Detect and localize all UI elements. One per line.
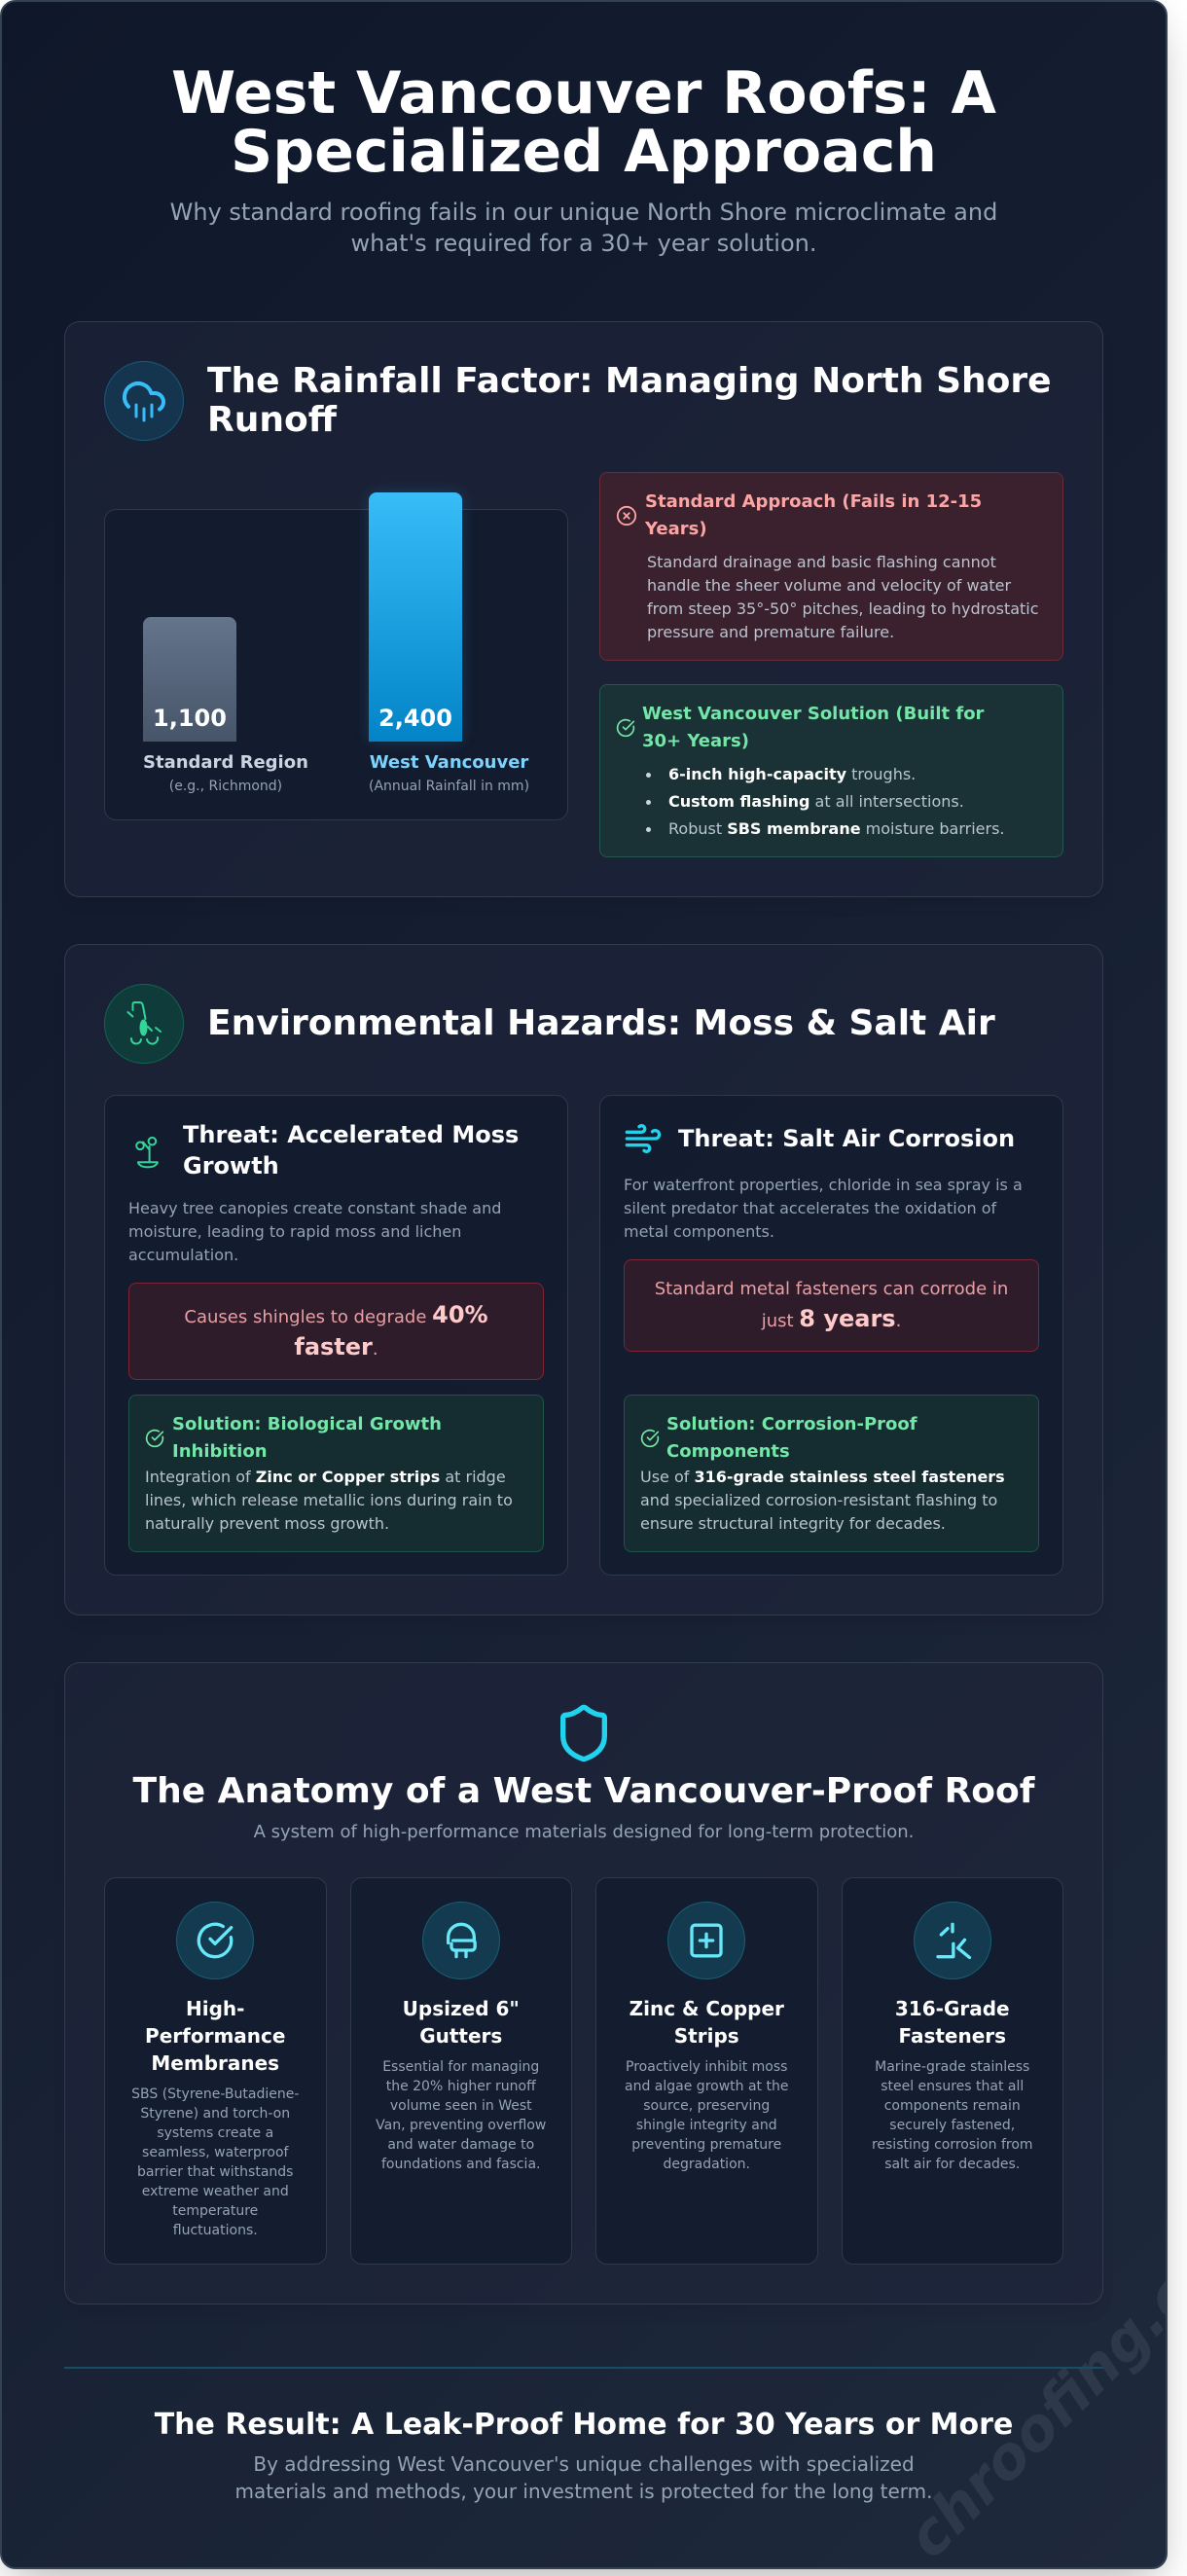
heading text [666,1414,917,1462]
card title: 316-Grade [895,1997,1010,2020]
bar: 2,400 [369,492,462,742]
stat callout: 40% faster [128,1283,544,1380]
card text: steel ensures that all [881,2079,1024,2094]
panel: roof anatomy [64,1662,1103,2304]
label: standard region: (e.g., Richmond) [169,779,282,794]
stat callout: 8 years: just 8 years. [762,1305,901,1332]
result text: materials and methods, your investment is protected for the long term. [234,2480,933,2503]
card title: Strips [674,2024,739,2048]
card title [403,1995,520,2050]
card text: volume seen in West [390,2098,532,2114]
icon: check circle [617,718,634,738]
card text: source, preserving [643,2098,770,2114]
card text: Styrene) and torch-on [140,2106,290,2122]
threat heading [625,1124,1015,1153]
stat callout: 8 years [624,1259,1039,1352]
callout body: from steep 35°-50° pitches, leading to hydrostatic [647,599,1039,618]
threat description: Heavy tree canopies create constant shade and [128,1199,501,1217]
solution body: lines, which release metallic ions during rain to [145,1491,513,1509]
callout body: handle the sheer volume and velocity of water [647,576,1011,595]
card text: fluctuations. [173,2223,258,2238]
card text: degradation. [664,2157,750,2172]
card text [625,2057,788,2174]
heading text: Years) [645,519,707,539]
solution body: naturally prevent moss growth. [145,1514,389,1533]
card text: Van, preventing overflow [376,2118,546,2133]
solution box: biological growth inhibition [128,1395,544,1552]
stat callout: 40% faster: faster. [294,1333,378,1361]
solution list: 6-inch high-capacity troughs. [668,765,916,783]
card: fasteners [841,1877,1063,2265]
solution list: Robust SBS membrane moisture barriers. [668,819,1005,838]
heading: The Anatomy of a West Vancouver-Proof Roof [133,1771,1034,1811]
subtitle: Why standard roofing fails in our unique North Shore microclimate and [170,199,997,226]
solution body [640,1468,1005,1533]
card: gutters [350,1877,572,2265]
callout: standard approach [599,472,1063,661]
solution list: Custom flashing at all intersections. [668,792,964,811]
label: standard region: Standard Region [143,752,308,773]
card text: foundations and fascia. [381,2157,540,2172]
card text: SBS (Styrene-Butadiene- [131,2086,299,2102]
heading text [642,704,985,751]
icon: shield [560,1705,607,1761]
card text [376,2057,546,2174]
heading text: 30+ Years) [642,731,749,751]
threat description [624,1176,1023,1241]
result heading: The Result: A Leak-Proof Home for 30 Years or More [155,2408,1013,2442]
icon: sprout [135,1137,159,1168]
heading text: West Vancouver Solution (Built for [642,704,984,724]
heading text: Standard Approach (Fails in 12-15 [645,491,982,512]
card text: and water damage to [387,2137,534,2153]
callout: west vancouver solution [599,684,1063,857]
title: Specialized Approach [231,118,937,186]
threat description: moisture, leading to rapid moss and lichen [128,1222,461,1241]
card text [131,2086,299,2238]
callout heading [617,491,982,539]
label: west vancouver [369,752,529,794]
panel: rainfall factor [64,321,1103,897]
rainfall content columns [104,472,1063,857]
card title: Gutters [419,2024,502,2048]
bar column: west vancouver [364,489,529,794]
title: West Vancouver Roofs: A [171,59,996,127]
solution box: corrosion-proof components [624,1395,1039,1552]
heading text: Runoff [207,400,337,440]
card text: and algae growth at the [625,2079,788,2094]
threat description: For waterfront properties, chloride in sea spray is a [624,1176,1023,1194]
card text: systems create a [157,2125,273,2141]
heading text: Solution: Corrosion-Proof [666,1414,917,1434]
card: membranes [104,1877,327,2265]
bar: 1,100 [143,617,236,742]
subheading: A system of high-performance materials designed for long-term protection. [254,1822,914,1842]
card text: salt air for decades. [884,2157,1020,2172]
solution list [646,765,1005,838]
card title: Performance [145,2024,285,2048]
solution body: ensure structural integrity for decades. [640,1514,946,1533]
icon: rain cloud [104,361,184,441]
label: west vancouver: West Vancouver [370,752,528,773]
heading text: The Rainfall Factor: Managing North Shore [207,361,1052,401]
icon: check circle [640,1429,660,1448]
threat columns [104,1095,1063,1576]
threat panel: moss [104,1095,568,1576]
icon: gutter [422,1902,500,1979]
card title: Membranes [151,2051,279,2075]
section heading: rainfall [104,361,1052,441]
solution body: Use of 316-grade stainless steel fasteners [640,1468,1005,1486]
card text: extreme weather and [142,2184,289,2199]
card text: the 20% higher runoff [386,2079,536,2094]
card title: Fasteners [898,2024,1006,2048]
heading text: Environmental Hazards: Moss & Salt Air [207,1003,995,1043]
header [170,59,997,257]
icon: x circle [617,506,636,526]
label: west vancouver: (Annual Rainfall in mm) [369,779,529,794]
card text: barrier that withstands [137,2164,293,2180]
comparison column [599,472,1063,857]
card text: Marine-grade stainless [875,2059,1029,2075]
card title [895,1995,1010,2050]
icon: square plus [667,1902,745,1979]
result text [64,2450,1103,2505]
card title [629,1995,784,2050]
card text: preventing premature [631,2137,781,2153]
card text: resisting corrosion from [872,2137,1033,2153]
card title: Zinc & Copper [629,1997,784,2020]
threat description: accumulation. [128,1246,238,1264]
bar: 2,400: 2,400 [378,705,452,732]
heading text: Solution: Biological Growth [172,1414,442,1434]
solution body: and specialized corrosion-resistant flashing to [640,1491,997,1509]
card text [872,2057,1033,2174]
threat description: metal components. [624,1222,774,1241]
card title [145,1997,285,2075]
heading text: Threat: Salt Air Corrosion [678,1125,1015,1152]
card text: shingle integrity and [636,2118,777,2133]
solution heading [146,1414,442,1462]
icon: check [176,1902,254,1979]
card title: High- [186,1997,244,2020]
material cards [104,1877,1063,2265]
card text: components remain [884,2098,1021,2114]
heading text: Components [666,1441,790,1462]
result footer [64,2367,1103,2505]
heading text [183,1121,519,1179]
solution body: Integration of Zinc or Copper strips at ridge [145,1468,506,1486]
callout heading [617,704,985,751]
stat callout: 8 years: Standard metal fasteners can corrode in [655,1279,1008,1299]
threat panel: salt air [599,1095,1063,1576]
bar chart: annual rainfall [104,509,568,820]
solution body [145,1468,513,1533]
heading text: Inhibition [172,1441,268,1462]
threat heading [135,1121,519,1179]
icon: wind [625,1124,662,1153]
title [171,59,996,186]
card text: temperature [172,2203,258,2219]
heading text [172,1414,442,1462]
callout body: Standard drainage and basic flashing cannot [647,553,996,571]
icon: check circle [146,1429,163,1448]
heading text [207,361,1052,440]
heading text: Growth [183,1152,279,1179]
bar: 1,100: 1,100 [153,705,227,732]
card title: Upsized 6" [403,1997,520,2020]
section heading: hazards [104,984,995,1064]
card: zinc and copper [595,1877,817,2265]
bar column: standard region [143,617,308,794]
result text: By addressing West Vancouver's unique challenges with specialized [253,2452,915,2476]
panel: environmental hazards [64,944,1103,1615]
callout body [647,553,1039,641]
subtitle: what's required for a 30+ year solution. [351,230,816,257]
callout body: pressure and premature failure. [647,623,894,641]
icon: fastener [914,1902,991,1979]
icon: moss and spores [104,984,184,1064]
card text: securely fastened, [889,2118,1015,2133]
subtitle [170,199,997,257]
label: standard region [143,752,308,794]
threat description: silent predator that accelerates the oxidation of [624,1199,996,1217]
heading text: Threat: Accelerated Moss [183,1121,519,1148]
card text: seamless, waterproof [142,2145,288,2160]
heading text [644,491,982,539]
card text: Proactively inhibit moss [626,2059,787,2075]
card text: Essential for managing [382,2059,539,2075]
solution heading [640,1414,917,1462]
threat description [128,1199,501,1264]
stat callout: 40% faster: Causes shingles to degrade 40% [184,1301,488,1328]
